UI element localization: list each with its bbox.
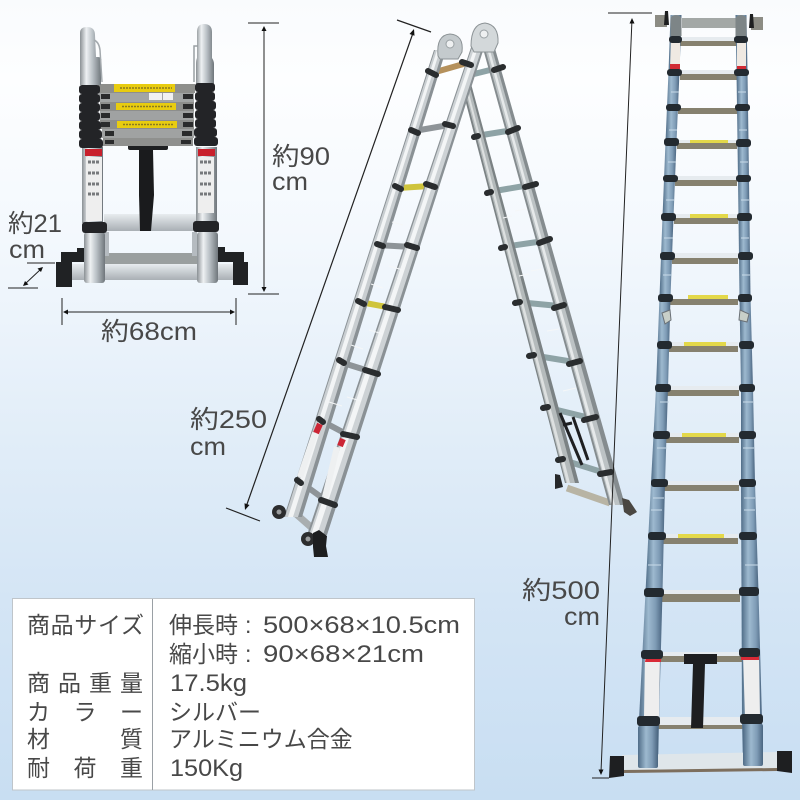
folding strap [684, 654, 717, 728]
front tube right [307, 40, 486, 535]
label: 約90 [272, 143, 330, 171]
spec values: アルミニウム合金 [169, 726, 353, 752]
base feet [609, 756, 624, 778]
stacked rung panels [98, 84, 195, 93]
spec values: 17.5kg [170, 670, 247, 697]
spec labels [27, 612, 144, 781]
top bar and brackets [682, 18, 736, 28]
base bar [70, 264, 234, 280]
lower tube sections [638, 726, 658, 768]
spec values: : [245, 641, 251, 667]
rung slots [101, 94, 193, 144]
front rungs [295, 63, 467, 528]
tube section marks [648, 92, 758, 565]
right post [196, 24, 214, 85]
spec labels: 商品サイズ [27, 612, 144, 638]
right black collars [194, 83, 218, 146]
specification table [12, 598, 474, 790]
spec labels: 商品重量 [27, 670, 143, 696]
folded ladder photo [56, 24, 248, 287]
spec labels: 耐荷重 [27, 755, 143, 781]
label: 約250 [190, 406, 267, 434]
hinges [438, 34, 462, 59]
base feet [56, 248, 84, 287]
label: 約500 [522, 577, 600, 605]
lower collars [82, 222, 107, 233]
front tube left [284, 50, 446, 517]
back tube inner [460, 80, 579, 483]
left post [80, 27, 101, 85]
label: 約21 [8, 210, 62, 238]
bottom labels [644, 655, 760, 717]
spec values: 500×68×10.5cm [263, 612, 460, 639]
hinge clips [662, 310, 749, 324]
top labels [670, 40, 746, 70]
rung with strap [104, 214, 196, 231]
spec values: 90×68×21cm [263, 641, 424, 668]
spec values: 伸長時 [169, 612, 238, 638]
spec values: 縮小時 [169, 641, 238, 667]
spec values: 150Kg [170, 755, 243, 782]
dimension: extended length 500 cm: cm [564, 603, 600, 631]
safety labels [85, 149, 102, 156]
spec values [169, 612, 460, 782]
dimension: depth 21 cm [8, 210, 62, 288]
spec labels: 材質 [27, 726, 143, 752]
right tube [736, 15, 763, 766]
A-frame ladder photo [272, 23, 637, 557]
spec values: シルバー [169, 699, 261, 725]
back tube outer [482, 45, 625, 505]
dimension: extended length 500 cm [522, 13, 652, 778]
rung tops: white and yellow [656, 37, 744, 725]
dimension: A-frame length 250 cm: cm [190, 433, 226, 461]
dimension: A-frame length 250 cm [190, 20, 431, 521]
tube heads [670, 15, 746, 36]
black stabilizer strap [560, 413, 588, 465]
extended straight ladder photo [609, 11, 792, 778]
black collars [297, 62, 611, 505]
dimension: height 90 cm: cm [272, 168, 308, 196]
tube collars [637, 36, 763, 726]
folding strap [128, 143, 168, 150]
spec values: : [245, 612, 251, 638]
yellow warning labels [114, 84, 175, 92]
wheels and feet [272, 505, 286, 519]
dimension: height 90 cm [248, 23, 330, 294]
left black collars [79, 85, 103, 148]
base bar [622, 752, 777, 772]
dimension: width 68 cm [62, 298, 236, 346]
rungs [656, 41, 744, 729]
telescoping section marks [329, 209, 576, 406]
safety labels [300, 433, 337, 497]
left tube [638, 15, 682, 768]
label: 約68cm [101, 318, 197, 346]
dimension: depth 21 cm: cm [9, 236, 45, 264]
back rungs [470, 68, 610, 503]
spec labels: カラー [27, 699, 143, 725]
